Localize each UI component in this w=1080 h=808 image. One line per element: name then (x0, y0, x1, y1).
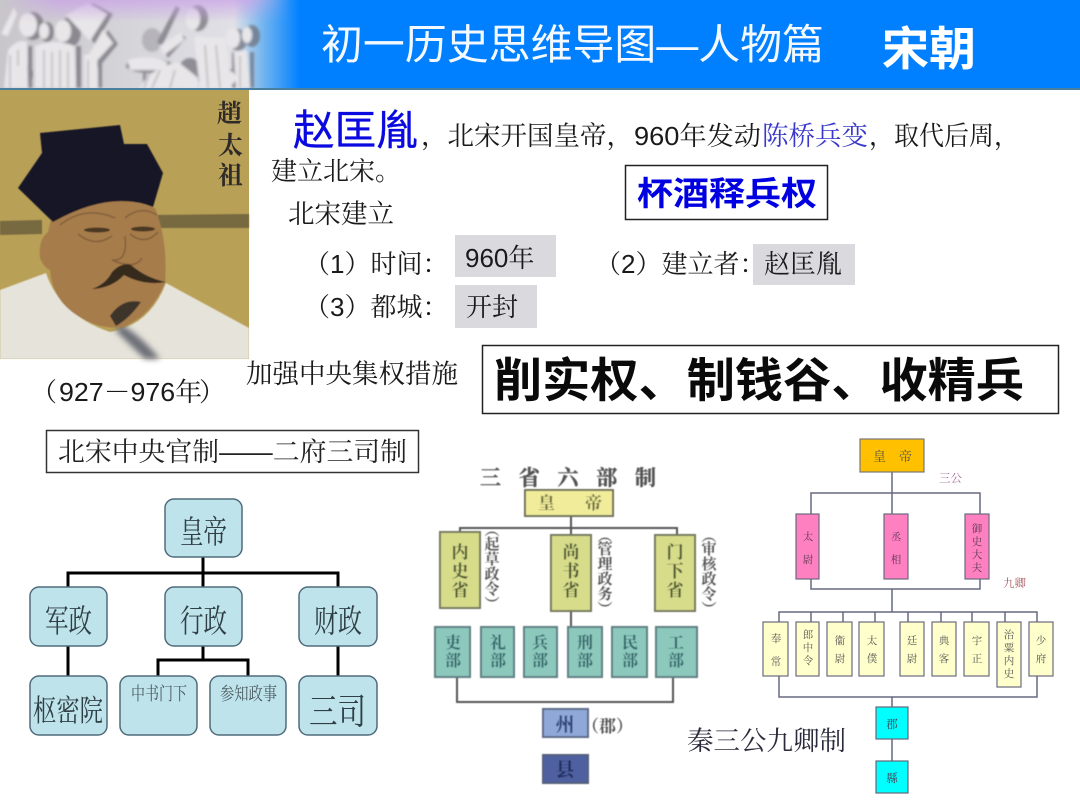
callout: cup of wine: 杯酒释兵权 (637, 175, 817, 212)
three departments: 省 (452, 580, 470, 600)
six ministries: 兵 (532, 634, 549, 652)
county node (543, 755, 588, 783)
three departments: 书 (562, 562, 580, 581)
fact: capital (304, 285, 537, 328)
three lords nodes (796, 514, 989, 579)
intro line two: 建立北宋。 (271, 156, 401, 186)
founding section heading: 北宋建立 (288, 199, 394, 229)
intro line one: ，北宋开国皇帝， (421, 121, 633, 151)
fact: capital: 开封 (466, 292, 518, 322)
fact: capital: （3）都城： (304, 292, 448, 322)
nodes (30, 499, 377, 735)
three lords nodes: 御 (972, 523, 983, 535)
dynasty heading: 宋朝 (882, 23, 976, 75)
nine ministers nodes: 尉 (907, 652, 918, 665)
chart: three departments six ministries (435, 467, 717, 783)
three departments: 省 (562, 580, 580, 600)
intro line one: ，取代后周， (869, 121, 1019, 151)
intro line one (421, 121, 1019, 151)
chart: Qin three lords nine ministers (763, 439, 1053, 793)
three lords nodes: 史 (972, 535, 983, 548)
calligraphy inscription: 趙 (217, 100, 242, 128)
node labels: 枢密院 (33, 695, 103, 728)
nine ministers nodes: 治 (1004, 628, 1015, 641)
three lords nodes: 大 (972, 548, 983, 561)
fact: founder (595, 244, 855, 285)
nine ministers nodes: 僕 (867, 652, 878, 665)
node labels: 财政 (314, 603, 362, 639)
department duties: 理 (597, 556, 613, 573)
nine ministers nodes: 少 (1036, 634, 1047, 647)
three lords nodes: 丞 (891, 531, 902, 543)
department duties: 起 (484, 535, 500, 553)
emperor node: 帝 (585, 493, 602, 513)
beam behind the figure (0, 214, 249, 235)
six ministries (435, 627, 697, 677)
nine ministers nodes: 中 (803, 641, 813, 654)
nine ministers nodes: 常 (771, 655, 782, 668)
nine ministers nodes: 衞 (835, 635, 846, 647)
department duties: 政 (701, 571, 717, 588)
portrait caption: life dates: ） (199, 377, 225, 407)
calligraphy inscription: 祖 (218, 162, 243, 190)
Qin system caption: 秦三公九卿制 (687, 726, 846, 756)
three departments (440, 532, 695, 611)
chart title: 三 省 六 部 制 (480, 467, 656, 490)
nine ministers nodes: 尉 (835, 652, 846, 665)
node labels: 行政 (180, 603, 227, 639)
intro line one: 960年发动 (634, 121, 761, 151)
fact: time: （1）时间： (304, 249, 448, 279)
chart: Song central government (30, 499, 377, 735)
intro text block (271, 107, 1019, 186)
six ministries: 部 (577, 652, 593, 670)
department duties: 令 (701, 585, 717, 603)
connectors (779, 472, 1037, 761)
nine ministers nodes (763, 622, 1053, 687)
three departments: 省 (666, 580, 684, 600)
beard (110, 301, 141, 326)
department duties: ︵ (701, 528, 717, 545)
three departments: 门 (666, 543, 684, 562)
department duties: ︶ (484, 596, 500, 613)
fact: time: 960年 (465, 243, 534, 273)
emperor node (860, 439, 924, 472)
calligraphy inscription (217, 100, 243, 190)
connectors (68, 557, 338, 676)
face highlights (60, 211, 158, 265)
three departments: 史 (452, 562, 468, 581)
node labels: 参知政事 (220, 684, 277, 704)
nine ministers nodes: 宇 (972, 635, 983, 647)
six ministries: 刑 (577, 634, 593, 652)
nine ministers nodes: 奉 (771, 632, 782, 645)
three lords nodes: 尉 (803, 553, 814, 566)
department duties: 草 (484, 550, 500, 568)
nine ministers nodes: 内 (1004, 654, 1014, 667)
fact: founder: （2）建立者： (595, 249, 765, 279)
department duties: ︶ (597, 601, 613, 618)
prefecture node (543, 709, 633, 737)
prefecture node: （郡） (582, 717, 633, 736)
callout: centralization measures: 削实权、制钱谷、收精兵 (494, 354, 1024, 407)
nine ministers nodes: 正 (972, 653, 983, 665)
department duties: 审 (701, 541, 717, 558)
nine ministers nodes: 粟 (1004, 642, 1015, 654)
three departments: 内 (452, 542, 468, 562)
callout: cup of wine (626, 166, 828, 220)
six ministries: 部 (668, 652, 684, 670)
three lords nodes: 太 (803, 530, 814, 543)
intro line one: 陈桥兵变 (762, 121, 868, 151)
department duties: 核 (701, 555, 717, 573)
department duties: 管 (597, 540, 613, 558)
nine ministers nodes: 令 (803, 654, 814, 667)
county node (876, 761, 908, 793)
department duties: 政 (597, 571, 613, 588)
portrait caption: life dates: 927－976年 (59, 377, 202, 407)
face (40, 200, 166, 328)
node labels (33, 514, 366, 732)
nine ministers nodes: 郎 (803, 628, 814, 641)
callout: centralization measures (482, 346, 1058, 414)
department duties (484, 522, 717, 618)
commandery node (876, 707, 908, 739)
nine ministers nodes: 太 (867, 634, 878, 647)
six ministries: 工 (668, 635, 684, 652)
moustache (92, 264, 166, 289)
emperor node (525, 490, 613, 516)
connectors (457, 516, 677, 702)
hat (18, 125, 163, 222)
emperor node: 皇 (538, 494, 555, 513)
nine ministers nodes: 客 (939, 652, 950, 665)
node labels: 三司 (309, 691, 366, 732)
nine ministers nodes: 府 (1036, 652, 1047, 665)
node labels: 中书门下 (131, 684, 187, 704)
nine ministers nodes: 史 (1004, 667, 1015, 680)
county node: 縣 (886, 772, 898, 785)
three lords nodes: 相 (891, 553, 901, 566)
portrait of Zhao Kuangyin (0, 90, 249, 359)
three departments: 尚 (562, 542, 580, 562)
icon: relief frieze of figures (1, 3, 260, 88)
eyes (84, 226, 155, 232)
nine ministers nodes: 典 (939, 634, 950, 647)
header banner (0, 0, 1080, 90)
emperor node: 皇 (873, 449, 886, 464)
three departments: 下 (666, 562, 684, 581)
founding facts (304, 235, 855, 328)
prefecture node: 州 (555, 714, 575, 736)
robe shadow (115, 325, 160, 359)
portrait caption: life dates: （ (31, 377, 57, 407)
commandery node: 郡 (886, 718, 898, 731)
nine ministers nodes: 廷 (907, 635, 918, 647)
six ministries: 部 (622, 652, 638, 670)
three lords label: 三公 (939, 472, 962, 485)
node labels: 军政 (45, 603, 92, 639)
department duties: ︶ (701, 601, 717, 618)
department duties: 令 (484, 580, 500, 598)
department duties: 务 (597, 585, 613, 603)
department duties: 政 (484, 566, 500, 583)
fact: time (304, 235, 556, 279)
title: 初一历史思维导图—人物篇 (321, 21, 824, 68)
department duties: ︵ (484, 522, 500, 539)
six ministries: 部 (490, 652, 506, 670)
department duties: ︵ (597, 528, 613, 545)
calligraphy inscription: 太 (218, 132, 243, 160)
nine ministers label: 九卿 (1003, 576, 1026, 590)
six ministries: 吏 (445, 634, 461, 652)
six ministries: 部 (532, 652, 548, 670)
three lords nodes: 夫 (972, 561, 983, 574)
emperor node: 帝 (899, 449, 912, 464)
fact: founder: 赵匡胤 (764, 249, 842, 279)
node labels: 皇帝 (180, 514, 227, 550)
six ministries: 民 (622, 634, 638, 652)
six ministries: 部 (445, 652, 461, 670)
robe (0, 273, 249, 359)
name heading: 赵匡胤 (293, 107, 418, 154)
Song system title: 北宋中央官制——二府三司制 (58, 437, 407, 467)
Song system title (46, 430, 418, 472)
six ministries: 礼 (490, 634, 506, 652)
county node: 县 (555, 759, 575, 781)
centralization label: 加强中央集权措施 (246, 359, 458, 389)
